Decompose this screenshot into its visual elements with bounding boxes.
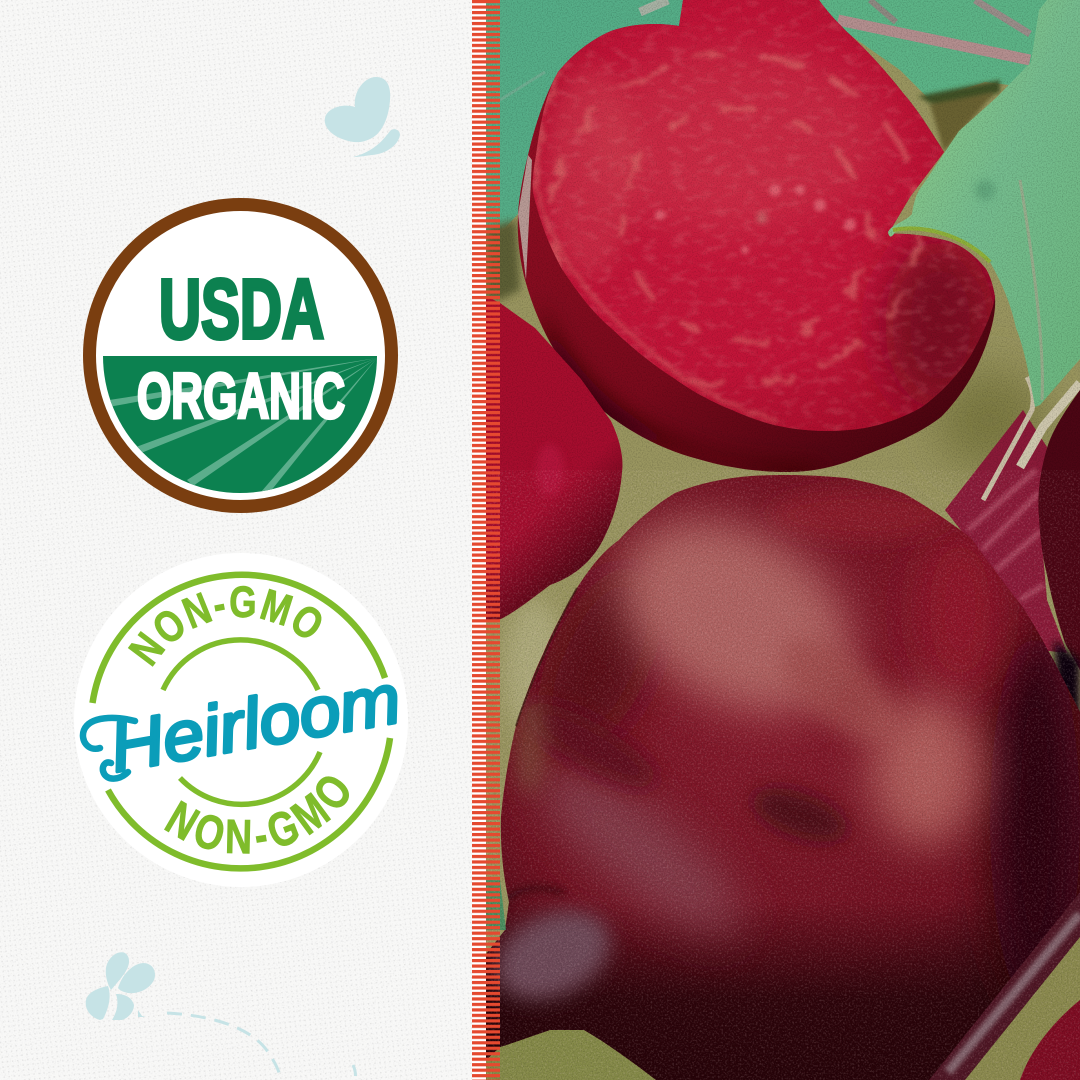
text: NON-GMO bottom: N — [224, 810, 253, 864]
icon: bee with dashed flight path — [86, 952, 356, 1076]
icon: butterfly — [325, 77, 400, 157]
text: NON-GMO top: - — [209, 580, 229, 630]
seal ring — [90, 204, 392, 506]
badge: USDA Organic seal — [90, 204, 392, 506]
cut face — [532, 0, 995, 431]
text: NON-GMO top: O — [282, 595, 332, 651]
text: NON-GMO bottom: O — [303, 765, 363, 821]
text: NON-GMO top: N — [176, 584, 218, 638]
text: NON-GMO top: O — [144, 599, 195, 654]
text: NON-GMO top — [120, 578, 332, 674]
text: USDA: USDA — [159, 262, 324, 356]
outer and inner ring arcs — [92, 575, 390, 868]
text: NON-GMO top: M — [255, 580, 298, 636]
red stems — [945, 377, 1080, 653]
left cut beet — [486, 296, 623, 622]
text: NON-GMO bottom: G — [260, 799, 306, 860]
leaf: right — [888, 0, 1080, 407]
text: NON-GMO bottom: O — [188, 803, 230, 863]
H swash of the script lettering — [83, 718, 135, 779]
text: NON-GMO bottom: M — [282, 784, 339, 845]
text: NON-GMO top: G — [229, 578, 257, 627]
photo: beets — [482, 0, 1080, 1080]
text: Heirloom script: Heirloom — [104, 659, 406, 787]
divider: red woven stripe — [472, 0, 500, 1080]
stem: bottom right — [929, 892, 1080, 1080]
text: NON-GMO bottom: N — [157, 792, 207, 851]
photo grain — [486, 0, 1080, 1080]
right beet — [1038, 390, 1080, 712]
green field with rays — [103, 356, 377, 493]
text: ORGANIC: ORGANIC — [137, 360, 345, 432]
half beet — [500, 0, 1020, 480]
white backing disc — [74, 553, 408, 887]
text: NON-GMO bottom — [157, 765, 363, 864]
bottom right beet — [1020, 1000, 1080, 1080]
ground — [486, 36, 1080, 954]
text: NON-GMO bottom: - — [250, 808, 271, 863]
text: NON-GMO top: N — [120, 625, 174, 674]
small green peek at left edge — [486, 880, 506, 930]
leaves and stems: top right — [800, 0, 1050, 152]
leaf: top left — [486, 0, 700, 300]
badge: Non-GMO Heirloom stamp — [74, 553, 408, 887]
panel: linen background — [0, 0, 486, 1080]
big beet — [482, 470, 1080, 1080]
